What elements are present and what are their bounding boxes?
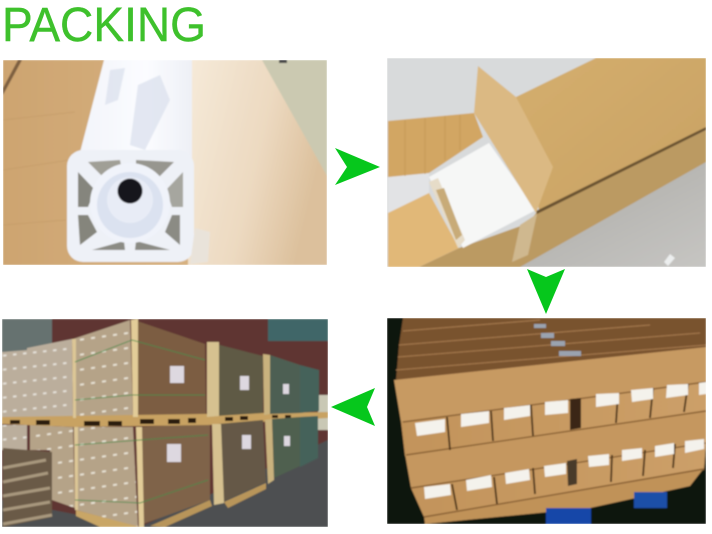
title: PACKING [2, 0, 206, 52]
blue pallet [546, 508, 591, 524]
panel: photo of wrapped roll with end plug [3, 60, 327, 265]
nearest stack front face upper [134, 320, 206, 417]
dark gaps between cartons [447, 384, 688, 510]
middle band [405, 410, 706, 488]
panel: stacked long cartons on blue pallet [387, 318, 706, 524]
inner left flap [388, 113, 483, 177]
box front face [419, 130, 706, 267]
arrow: left [331, 388, 375, 426]
empty pallets [3, 448, 52, 527]
panel: roll inside opened cardboard box [387, 58, 706, 267]
second stack [216, 344, 263, 416]
top faces of cartons [396, 318, 706, 380]
nearest stack side face [73, 320, 133, 418]
box top face [516, 58, 706, 210]
panel: palletised cartons in warehouse [2, 319, 328, 527]
corner posts [131, 319, 138, 417]
third stack [270, 355, 300, 414]
pallet feet [76, 510, 140, 527]
arrow: right [335, 148, 380, 185]
plastic end plug [67, 150, 194, 262]
lower flap [388, 193, 459, 267]
arrow: down [527, 269, 565, 314]
wrapped white roll [78, 60, 192, 160]
nearest stack front face lower [140, 423, 210, 524]
pallet band [2, 412, 328, 427]
far stacks, side faces [2, 350, 27, 420]
carton labels [167, 366, 290, 462]
bottom band [424, 468, 704, 524]
row shadow lines [403, 382, 706, 517]
wrapped roll [429, 143, 536, 248]
upper band [394, 347, 706, 422]
carton labels [415, 382, 706, 499]
green straps [75, 340, 208, 503]
raised flap [474, 66, 553, 213]
top-face tags [534, 324, 581, 356]
